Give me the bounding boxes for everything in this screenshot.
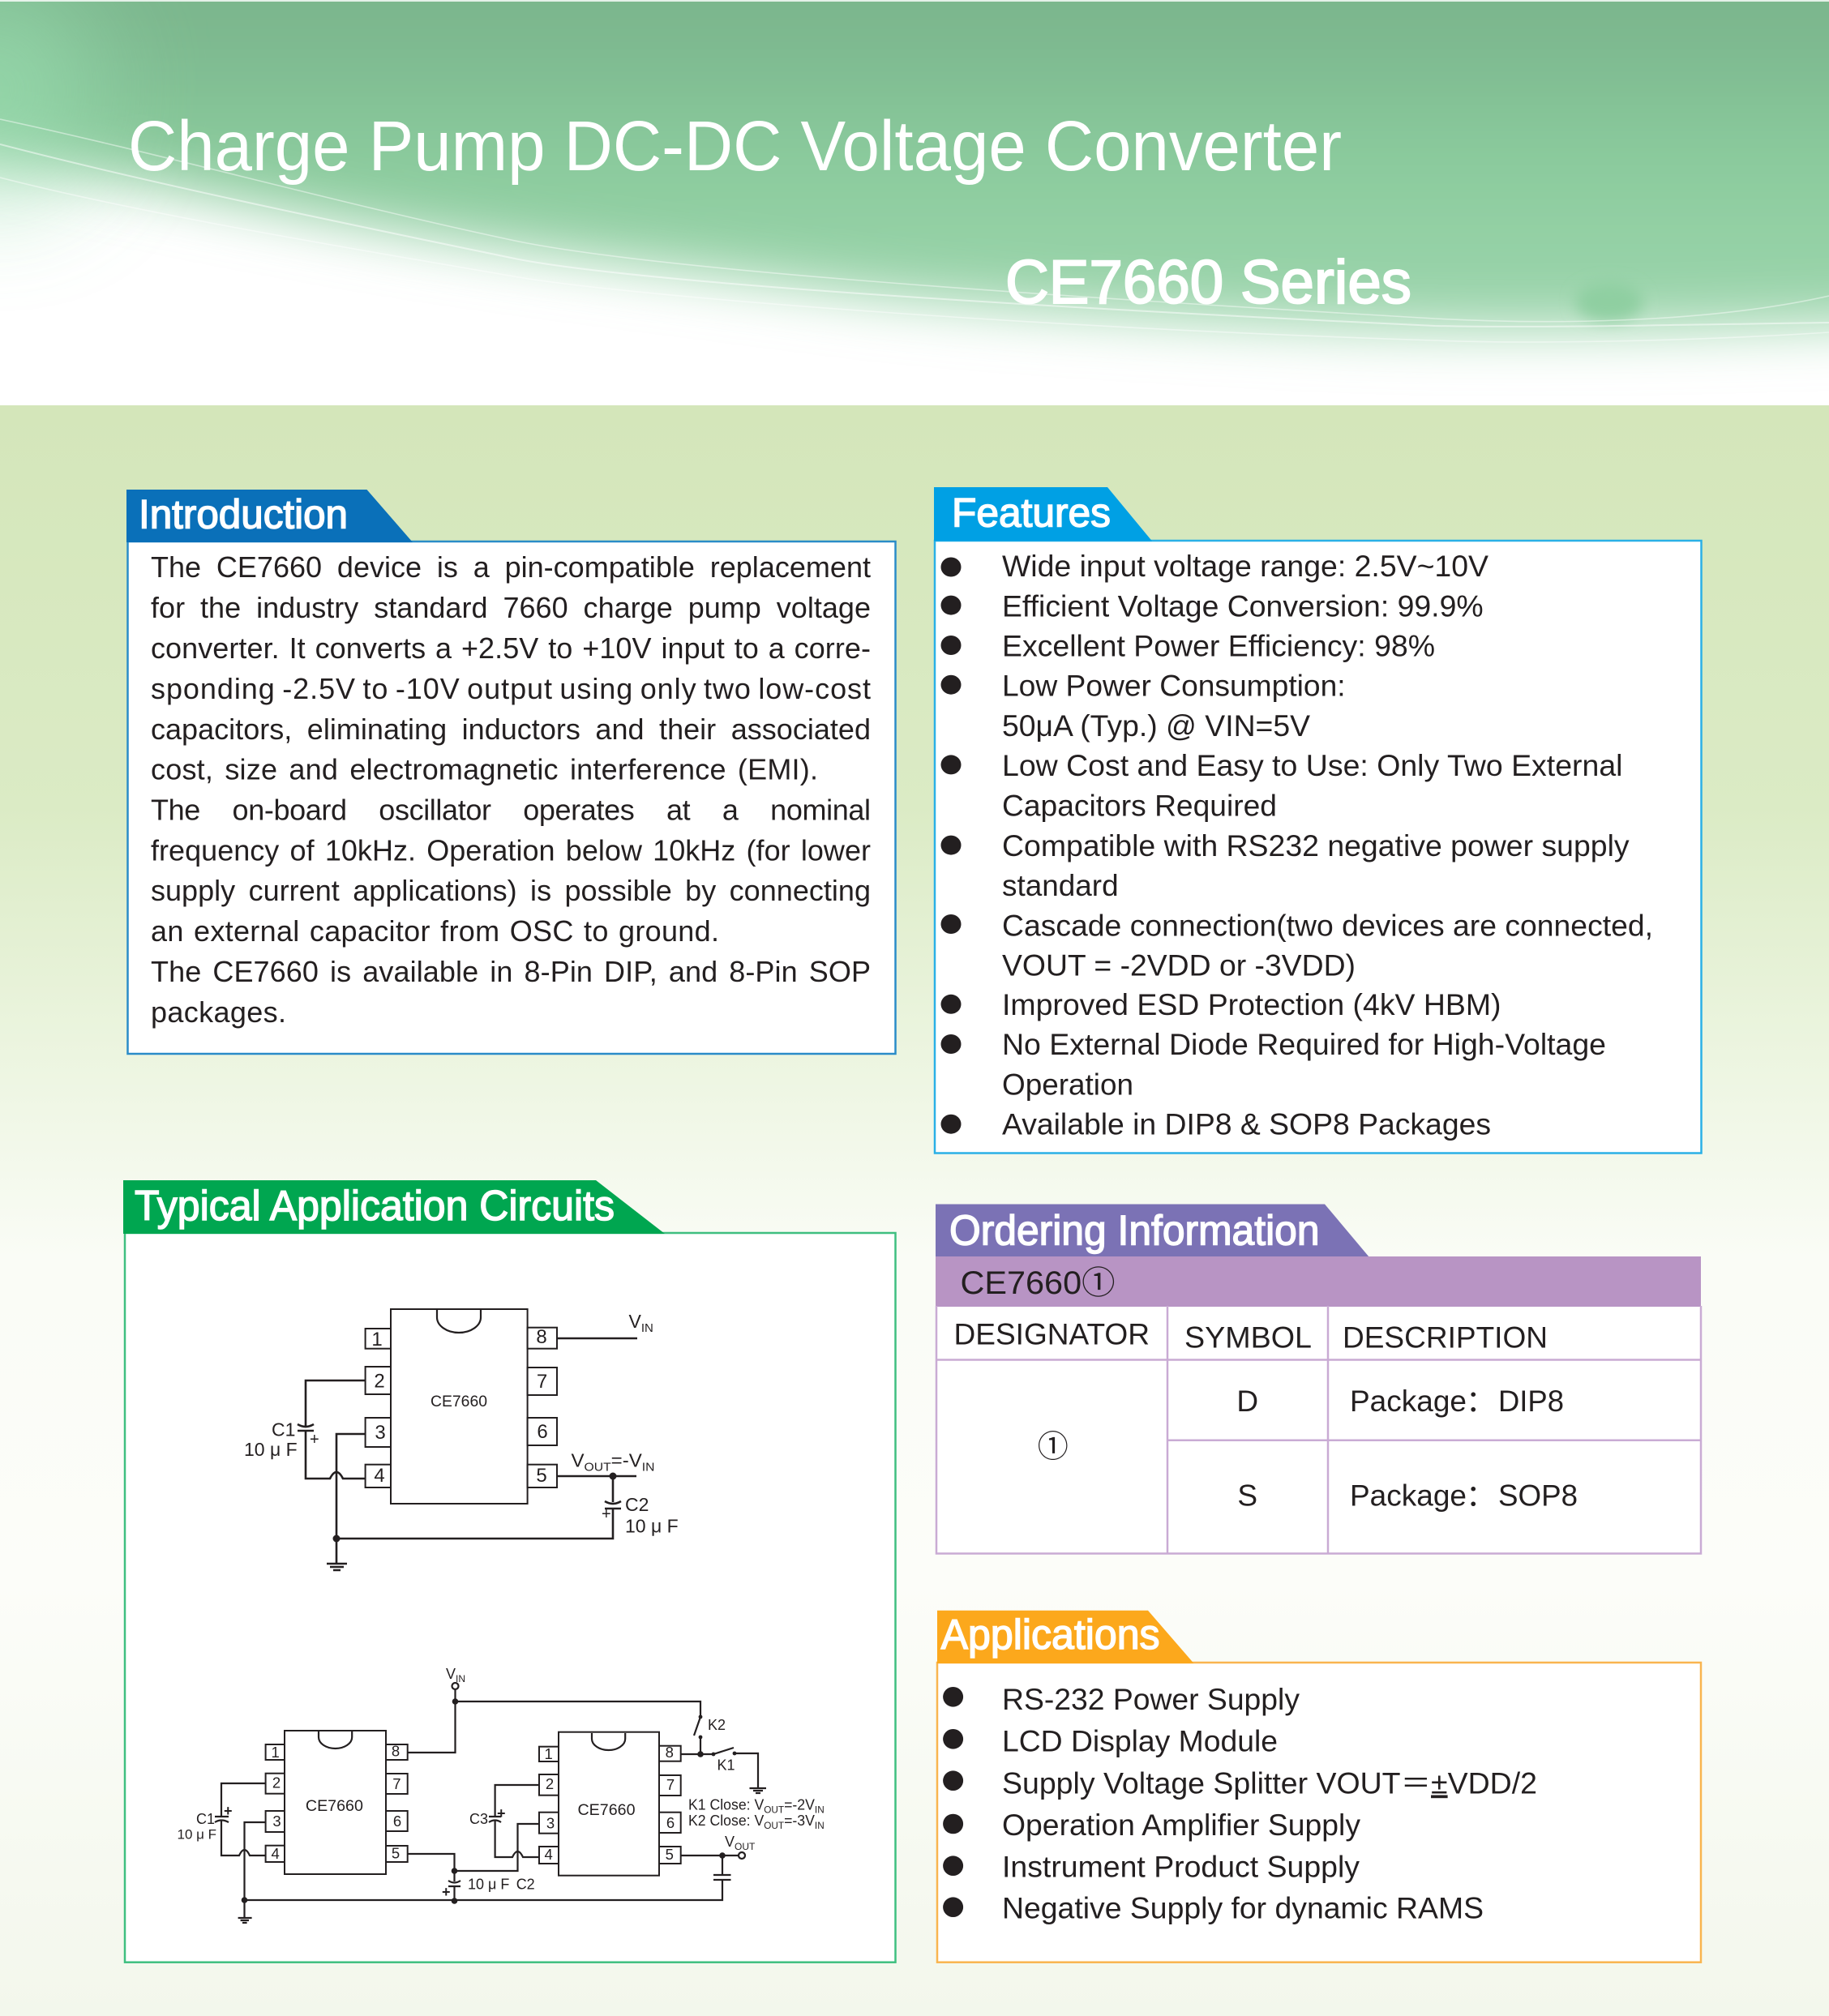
text block: introduction paragraph: sponding -2.5V to -10V output using only two low-cost	[151, 672, 871, 705]
circuit diagram: single CE7660	[244, 1309, 679, 1570]
text block: introduction paragraph: The CE7660 is available in 8-Pin DIP, and 8-Pin SOP	[151, 955, 871, 988]
chip B with pins: 8	[666, 1744, 674, 1761]
text block: introduction paragraph	[151, 550, 871, 1029]
chip B with pins: 6	[666, 1814, 675, 1831]
chip B with pins	[539, 1732, 681, 1876]
chip B with pins: 2	[546, 1775, 554, 1792]
header banner: green gradient with white curve	[0, 0, 1829, 405]
text block: introduction paragraph: packages.	[151, 995, 286, 1029]
heading tab: introduction	[126, 490, 413, 542]
component labels: 10 μ F	[468, 1877, 509, 1893]
subtitle: series name: CE7660 Series	[1005, 248, 1411, 317]
text block: applications list: LCD Display Module	[1002, 1725, 1278, 1757]
bullets: applications	[943, 1687, 963, 1917]
part number band: CE7660①	[960, 1265, 1116, 1301]
table body rows	[1038, 1385, 1578, 1513]
component labels: OUT	[764, 1804, 785, 1816]
text block: introduction paragraph: for the industry standard 7660 charge pump voltage	[151, 591, 871, 624]
chip B with pins: 7	[666, 1776, 675, 1793]
component labels: IN	[641, 1321, 653, 1335]
wiring, capacitors and ground	[298, 1338, 637, 1570]
table body rows: D	[1236, 1385, 1258, 1418]
text block: features list: Available in DIP8 & SOP8 Packages	[1002, 1108, 1491, 1141]
table body rows: ：	[1466, 1385, 1496, 1418]
text block: features list: Excellent Power Efficiency: 98%	[1002, 629, 1435, 662]
chip body with pins: 4	[374, 1465, 385, 1487]
text block: features list: Improved ESD Protection (4kV HBM)	[1002, 988, 1501, 1021]
chip A with pins: 1	[272, 1744, 280, 1761]
component labels: 10 μ F	[244, 1439, 298, 1460]
text block: introduction paragraph: cost, size and electromagnetic interference (EMI).	[151, 752, 818, 786]
table body rows: SOP8	[1498, 1479, 1578, 1513]
component labels: C2	[625, 1494, 649, 1515]
chip B with pins: 5	[666, 1846, 674, 1863]
panel: ordering information	[936, 1205, 1701, 1553]
text block: introduction paragraph: frequency of 10kHz. Operation below 10kHz (for lower	[151, 833, 871, 867]
chip B with pins: 1	[545, 1745, 553, 1762]
component labels: 10 μ F	[625, 1516, 679, 1537]
component labels: IN	[815, 1820, 825, 1831]
component labels	[244, 1311, 679, 1537]
heading tab: features	[934, 487, 1152, 541]
component labels: K2	[708, 1717, 726, 1733]
panel: applications	[937, 1611, 1701, 1962]
component labels: K1 Close: V	[688, 1797, 765, 1813]
component labels: =-3V	[784, 1813, 815, 1829]
text block: introduction paragraph: an external capacitor from OSC to ground.	[151, 914, 719, 948]
component labels: =-2V	[784, 1797, 815, 1813]
bullets: features	[940, 558, 962, 1134]
chip body with pins: 7	[537, 1371, 547, 1393]
chip body with pins: 3	[375, 1422, 386, 1444]
component labels: +	[602, 1505, 611, 1523]
chip body with pins: 8	[536, 1326, 547, 1348]
text block: features list	[1002, 550, 1653, 1141]
component labels: IN	[815, 1804, 825, 1816]
chip body with pins: 1	[371, 1329, 383, 1350]
part number band	[936, 1256, 1701, 1307]
chip body with pins: 2	[374, 1371, 385, 1393]
text block: features list: 50μA (Typ.) @ VIN=5V	[1002, 709, 1310, 743]
panel: introduction	[126, 490, 895, 1054]
table body rows: ①	[1038, 1430, 1069, 1464]
ordering table grid	[936, 1306, 1701, 1553]
chip A with pins: 5	[392, 1845, 400, 1862]
text block: features list: Wide input voltage range: 2.5V~10V	[1002, 550, 1488, 583]
component labels: C1	[272, 1419, 295, 1440]
component labels: +	[442, 1884, 451, 1900]
table header row: DESIGNATOR	[953, 1318, 1150, 1351]
component labels: IN	[642, 1461, 655, 1474]
table header row	[953, 1318, 1548, 1354]
component labels: V	[446, 1666, 456, 1682]
text block: features list: Low Power Consumption:	[1002, 670, 1346, 703]
title: Charge Pump DC-DC Voltage Converter	[128, 107, 1342, 186]
text block: applications list: Operation Amplifier Supply	[1002, 1808, 1360, 1842]
text block: features list: Cascade connection(two devices are connected,	[1002, 910, 1653, 943]
component labels	[177, 1666, 825, 1900]
table body rows: Package	[1350, 1479, 1467, 1513]
text block: features list: Low Cost and Easy to Use: Only Two External	[1002, 749, 1623, 782]
component labels: K2 Close: V	[688, 1813, 765, 1829]
chip B with pins: 4	[545, 1846, 553, 1863]
text block: applications list: RS-232 Power Supply	[1002, 1683, 1300, 1716]
table header row: SYMBOL	[1184, 1320, 1312, 1354]
panel: typical application circuits	[123, 1180, 895, 1962]
component labels: +	[497, 1805, 506, 1821]
chip A with pins: CE7660	[306, 1798, 363, 1815]
component labels: C3	[469, 1811, 488, 1827]
component labels: OUT	[764, 1820, 785, 1831]
component labels: K1	[717, 1757, 735, 1773]
component labels: C2	[516, 1877, 535, 1893]
text block: applications list: Supply Voltage Splitter VOUT＝±VDD/2	[1002, 1767, 1537, 1800]
chip A with pins: 8	[392, 1743, 400, 1760]
text block: features list: Operation	[1002, 1068, 1133, 1102]
component labels: OUT	[585, 1461, 611, 1474]
text block: introduction paragraph: The CE7660 device is a pin-compatible replacement	[151, 550, 871, 584]
component labels: IN	[456, 1673, 465, 1684]
chip A with pins: 7	[392, 1775, 401, 1792]
text block: features list: standard	[1002, 869, 1119, 902]
heading tab: introduction: Introduction	[139, 491, 348, 537]
heading tab: typical application circuits: Typical Application Circuits	[135, 1183, 615, 1230]
text block: applications list: Instrument Product Supply	[1002, 1850, 1360, 1884]
component labels: +	[310, 1431, 319, 1449]
chip B with pins: CE7660	[577, 1802, 636, 1819]
chip A with pins: 3	[272, 1813, 281, 1830]
chip body with pins	[366, 1309, 557, 1504]
text block: features list: Compatible with RS232 negative power supply	[1002, 829, 1630, 862]
text block: introduction paragraph: The on-board oscillator operates at a nominal	[151, 793, 871, 827]
component labels: 10 μ F	[177, 1827, 216, 1843]
heading tab: ordering information: Ordering Information	[949, 1208, 1320, 1255]
chip body with pins: 6	[537, 1421, 548, 1443]
component labels: +	[224, 1803, 233, 1819]
wiring, switches, capacitors and ground	[215, 1683, 766, 1923]
heading tab: features: Features	[952, 490, 1111, 535]
component labels: C1	[196, 1811, 215, 1827]
chip A with pins	[266, 1731, 408, 1874]
heading tab: applications: Applications	[941, 1612, 1160, 1659]
chip A with pins: 4	[272, 1845, 280, 1862]
panel: features	[934, 487, 1701, 1153]
table body rows: ：	[1466, 1479, 1496, 1513]
text block: features list: Efficient Voltage Conversion: 99.9%	[1002, 590, 1484, 623]
component labels: V	[725, 1834, 735, 1850]
table body rows: DIP8	[1498, 1385, 1564, 1418]
page background: pale green gradient	[0, 405, 1829, 2016]
text block: applications list	[1002, 1683, 1537, 1924]
component labels: V	[571, 1449, 584, 1470]
component labels: =-V	[611, 1449, 642, 1470]
text block: introduction paragraph: supply current applications) is possible by connecting	[151, 874, 871, 907]
text block: applications list: Negative Supply for dynamic RAMS	[1002, 1892, 1484, 1924]
text block: features list: No External Diode Required for High-Voltage	[1002, 1028, 1606, 1061]
circuit diagram: cascaded CE7660	[177, 1666, 825, 1923]
table body rows: S	[1237, 1479, 1257, 1513]
table body rows: Package	[1350, 1385, 1467, 1418]
component labels: V	[629, 1311, 641, 1332]
component labels: OUT	[735, 1841, 756, 1852]
chip A with pins: 2	[272, 1774, 281, 1791]
text block: features list: VOUT = -2VDD or -3VDD)	[1002, 948, 1356, 982]
chip B with pins: 3	[546, 1815, 555, 1832]
text block: introduction paragraph: capacitors, eliminating inductors and their associated	[151, 713, 871, 746]
chip A with pins: 6	[393, 1813, 401, 1830]
chip body with pins: CE7660	[430, 1393, 487, 1410]
text block: features list: Capacitors Required	[1002, 790, 1277, 823]
chip body with pins: 5	[536, 1465, 547, 1487]
text block: introduction paragraph: converter. It converts a +2.5V to +10V input to a corre-	[151, 631, 871, 665]
table header row: DESCRIPTION	[1343, 1320, 1548, 1354]
